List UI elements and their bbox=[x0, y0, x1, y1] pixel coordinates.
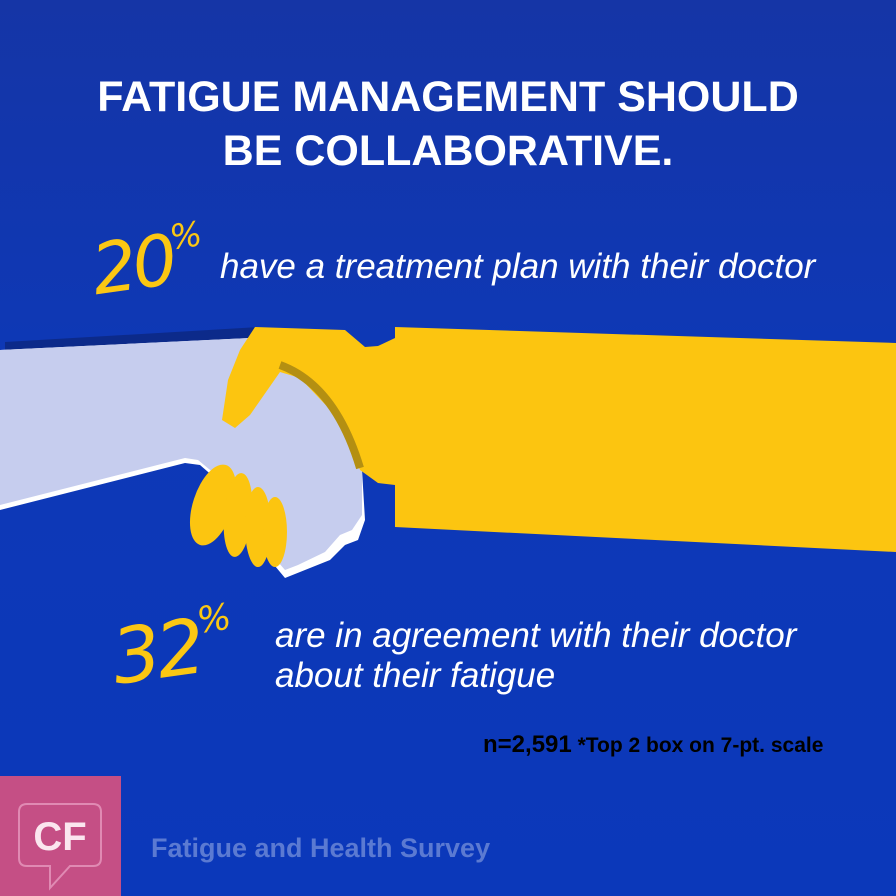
yellow hand bbox=[181, 327, 896, 567]
title bbox=[97, 73, 799, 175]
logo bbox=[0, 776, 121, 896]
stat 1 text: have a treatment plan with their doctor bbox=[220, 247, 815, 286]
arm shadow bbox=[5, 327, 262, 360]
logo bubble: CF bbox=[33, 815, 87, 859]
thumb shadow bbox=[280, 365, 360, 468]
stat 2 text bbox=[275, 616, 798, 695]
stat 2 text: are in agreement with their doctor bbox=[275, 616, 796, 655]
stat 2 bbox=[106, 597, 798, 702]
fingers bbox=[181, 459, 245, 551]
footer text: Fatigue and Health Survey bbox=[151, 833, 490, 863]
handshake illustration bbox=[0, 327, 896, 578]
stat 2 text: about their fatigue bbox=[275, 656, 555, 695]
title: FATIGUE MANAGEMENT SHOULD bbox=[97, 73, 799, 121]
footnote: n=2,591 *Top 2 box on 7-pt. scale bbox=[483, 731, 823, 758]
light hand bbox=[0, 338, 365, 578]
title: BE COLLABORATIVE. bbox=[223, 127, 673, 175]
logo bubble bbox=[18, 803, 102, 890]
stat 1 bbox=[87, 215, 816, 311]
stat 1 number: 20% bbox=[87, 215, 201, 311]
stat 2 number: 32% bbox=[106, 597, 230, 702]
